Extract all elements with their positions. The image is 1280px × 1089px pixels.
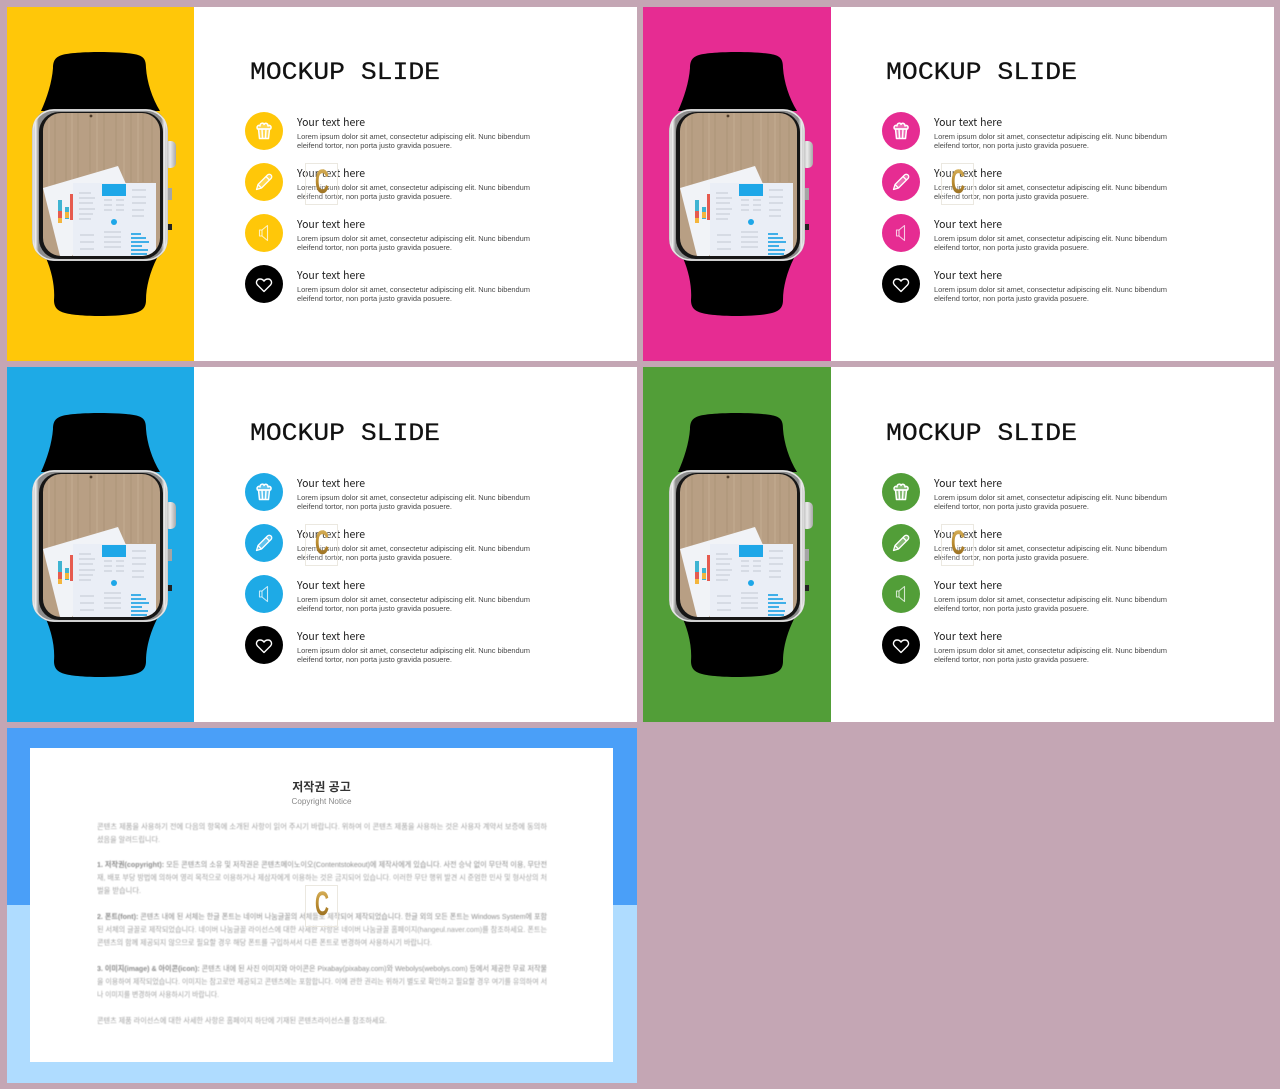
- item 2: pencil icon and text: Your text here: [933, 526, 1002, 542]
- item 1: gift icon and text: Your text here: [933, 475, 1002, 491]
- watermark: gold C: [306, 524, 338, 566]
- item 4: heart icon and text: Your text here: [296, 267, 365, 283]
- item 1: gift icon and text: [245, 112, 530, 150]
- item 4: heart icon and text: [245, 626, 530, 664]
- item 1: gift icon and text: eleifend tortor, non porta justo gravida posuere.: [934, 141, 1089, 150]
- item 4: heart icon and text: eleifend tortor, non porta justo gravida posuere.: [297, 655, 452, 664]
- item 2: pencil icon and text: [882, 524, 1167, 562]
- item 1: gift icon and text: [882, 473, 1167, 511]
- notice intro text: [97, 821, 547, 844]
- item 4: heart icon and text: Lorem ipsum dolor sit amet, consectetur adipiscing elit. Nunc bibendum: [297, 646, 530, 655]
- item 2: pencil icon and text: Your text here: [296, 526, 365, 542]
- item 2: pencil icon and text: [245, 524, 530, 562]
- item 2: pencil icon and text: [245, 163, 530, 201]
- item 2: pencil icon and text: Your text here: [933, 165, 1002, 181]
- notice section 2: font: [97, 911, 547, 947]
- item 1: gift icon and text: eleifend tortor, non porta justo gravida posuere.: [297, 502, 452, 511]
- watermark: gold C: C: [951, 524, 965, 562]
- item 4: heart icon and text: eleifend tortor, non porta justo gravida posuere.: [934, 294, 1089, 303]
- notice section 3: image and icon: 3. 이미지(image) & 아이콘(icon): 콘텐츠 내에 된 사진 이미지와 아이콘은 Pixabay(pixabay.com)와 Webolys(webolys.com) 등에서 제공한 무료 저작물: [97, 963, 547, 973]
- watermark: gold C: [942, 163, 974, 204]
- item 4: heart icon and text: Your text here: [933, 628, 1002, 644]
- item 1: gift icon and text: Lorem ipsum dolor sit amet, consectetur adipiscing elit. Nunc bibendum: [934, 132, 1167, 141]
- item 3: speaker icon and text: eleifend tortor, non porta justo gravida posuere.: [934, 243, 1089, 252]
- watermark: gold C: C: [951, 163, 965, 201]
- panel: copyright notice: [7, 728, 637, 1083]
- watermark: gold C: [306, 885, 338, 926]
- item 3: speaker icon and text: eleifend tortor, non porta justo gravida posuere.: [934, 604, 1089, 613]
- notice title: 저작권 공고: [292, 779, 351, 794]
- notice subtitle: Copyright Notice: [292, 796, 352, 806]
- notice section 3: image and icon: [97, 963, 547, 999]
- item 1: gift icon and text: Lorem ipsum dolor sit amet, consectetur adipiscing elit. Nunc bibendum: [297, 132, 530, 141]
- item 1: gift icon and text: [245, 473, 530, 511]
- notice section 2: font: 된 서체의 글꼴로 제작되었습니다. 네이버 나눔글꼴 라이선스에 대한 사세한 사항은 네이버 나눔글꼴 홈페이지(hangeul.naver.com)를 참조하세요. 폰트는: [97, 924, 547, 934]
- item 3: speaker icon and text: [245, 214, 530, 252]
- panel: green mockup slide: [643, 367, 1274, 722]
- watermark: gold C: [942, 524, 974, 566]
- panel: blue mockup slide: [7, 367, 637, 722]
- item 1: gift icon and text: [882, 112, 1167, 150]
- item 2: pencil icon and text: eleifend tortor, non porta justo gravida posuere.: [934, 553, 1089, 562]
- watermark: gold C: C: [315, 885, 329, 923]
- item 2: pencil icon and text: eleifend tortor, non porta justo gravida posuere.: [934, 192, 1089, 201]
- item 3: speaker icon and text: Lorem ipsum dolor sit amet, consectetur adipiscing elit. Nunc bibendum: [934, 234, 1167, 243]
- item 2: pencil icon and text: eleifend tortor, non porta justo gravida posuere.: [297, 553, 452, 562]
- item 1: gift icon and text: Your text here: [933, 114, 1002, 130]
- item 2: pencil icon and text: eleifend tortor, non porta justo gravida posuere.: [297, 192, 452, 201]
- notice footer line: 콘텐츠 제품 라이선스에 대한 사세한 사항은 홈페이지 하단에 기재된 콘텐츠라이선스를 참조하세요.: [97, 1015, 387, 1025]
- item 2: pencil icon and text: Lorem ipsum dolor sit amet, consectetur adipiscing elit. Nunc bibendum: [934, 544, 1167, 553]
- item 3: speaker icon and text: Lorem ipsum dolor sit amet, consectetur adipiscing elit. Nunc bibendum: [934, 595, 1167, 604]
- item 4: heart icon and text: Your text here: [933, 267, 1002, 283]
- item 3: speaker icon and text: Your text here: [933, 577, 1002, 593]
- item 4: heart icon and text: eleifend tortor, non porta justo gravida posuere.: [934, 655, 1089, 664]
- item 1: gift icon and text: eleifend tortor, non porta justo gravida posuere.: [934, 502, 1089, 511]
- item 4: heart icon and text: [882, 626, 1167, 664]
- notice section 2: font: 콘텐츠의 함께 제공되지 않으므로 필요할 경우 해당 폰트를 구입하셔서 다른 폰트로 변경하여 사용하시기 바랍니다.: [97, 937, 432, 947]
- notice section 3: image and icon: 을 이용하여 제작되었습니다. 이미지는 참고로만 제공되고 콘텐츠에는 포함합니다. 이에 관한 권리는 위하기 별도로 확인하고 필요할 경우 여기를 유의하여 서: [97, 976, 547, 986]
- notice section 1: copyright: 재, 배포 부당 방법에 의하여 영리 목적으로 이용하거나 제삼자에게 이용하는 것은 금지되어 있습니다. 이러한 무단 행위 발견 시 준엄한 민사 및 형사상의 처: [97, 872, 547, 882]
- item 4: heart icon and text: Lorem ipsum dolor sit amet, consectetur adipiscing elit. Nunc bibendum: [934, 646, 1167, 655]
- item 3: speaker icon and text: Your text here: [296, 216, 365, 232]
- item 4: heart icon and text: Lorem ipsum dolor sit amet, consectetur adipiscing elit. Nunc bibendum: [934, 285, 1167, 294]
- item 1: gift icon and text: Lorem ipsum dolor sit amet, consectetur adipiscing elit. Nunc bibendum: [297, 493, 530, 502]
- item 2: pencil icon and text: Your text here: [296, 165, 365, 181]
- item 3: speaker icon and text: [882, 575, 1167, 613]
- item 2: pencil icon and text: Lorem ipsum dolor sit amet, consectetur adipiscing elit. Nunc bibendum: [297, 183, 530, 192]
- panel: magenta mockup slide: [643, 7, 1274, 361]
- watermark: gold C: [306, 163, 338, 204]
- item 2: pencil icon and text: [882, 163, 1167, 201]
- panel: yellow mockup slide: [7, 7, 637, 361]
- item 4: heart icon and text: eleifend tortor, non porta justo gravida posuere.: [297, 294, 452, 303]
- item 3: speaker icon and text: eleifend tortor, non porta justo gravida posuere.: [297, 243, 452, 252]
- notice section 3: image and icon: 나 이미지를 변경하여 사용하시기 바랍니다.: [97, 989, 219, 999]
- item 1: gift icon and text: eleifend tortor, non porta justo gravida posuere.: [297, 141, 452, 150]
- item 3: speaker icon and text: Lorem ipsum dolor sit amet, consectetur adipiscing elit. Nunc bibendum: [297, 234, 530, 243]
- heading: blue slide: MOCKUP SLIDE: [250, 419, 440, 448]
- notice section 2: font: 2. 폰트(font): 콘텐츠 내에 된 서체는 한글 폰트는 네이버 나눔글꼴의 서체들로 제작되어 제작되었습니다. 한글 외의 모든 폰트는 Windows System에 포함: [97, 911, 547, 921]
- item 3: speaker icon and text: [882, 214, 1167, 252]
- heading: yellow slide: MOCKUP SLIDE: [250, 58, 440, 87]
- item 3: speaker icon and text: Your text here: [933, 216, 1002, 232]
- item 3: speaker icon and text: [245, 575, 530, 613]
- item 2: pencil icon and text: Lorem ipsum dolor sit amet, consectetur adipiscing elit. Nunc bibendum: [297, 544, 530, 553]
- notice intro text: 셨음을 알려드립니다.: [97, 834, 160, 844]
- item 4: heart icon and text: Your text here: [296, 628, 365, 644]
- item 4: heart icon and text: [882, 265, 1167, 303]
- watermark: gold C: C: [315, 524, 329, 562]
- item 3: speaker icon and text: eleifend tortor, non porta justo gravida posuere.: [297, 604, 452, 613]
- notice section 1: copyright: [97, 859, 547, 895]
- notice intro text: 콘텐츠 제품을 사용하기 전에 다음의 항목에 소개된 사항이 읽어 주시기 바랍니다. 위하여 이 콘텐츠 제품을 사용하는 것은 사용자 계약서 보증에 동의하: [97, 821, 547, 831]
- heading: green slide: MOCKUP SLIDE: [886, 419, 1077, 448]
- item 4: heart icon and text: Lorem ipsum dolor sit amet, consectetur adipiscing elit. Nunc bibendum: [297, 285, 530, 294]
- notice section 1: copyright: 벌을 받습니다.: [97, 885, 141, 895]
- item 1: gift icon and text: Your text here: [296, 114, 365, 130]
- item 2: pencil icon and text: Lorem ipsum dolor sit amet, consectetur adipiscing elit. Nunc bibendum: [934, 183, 1167, 192]
- watermark: gold C: C: [315, 163, 329, 201]
- item 1: gift icon and text: Lorem ipsum dolor sit amet, consectetur adipiscing elit. Nunc bibendum: [934, 493, 1167, 502]
- item 1: gift icon and text: Your text here: [296, 475, 365, 491]
- notice section 1: copyright: 1. 저작권(copyright): 모든 콘텐츠의 소유 및 저작권은 콘텐츠메이노이오(Contentstokeout)에 제작사에게 있습니다. 사전 승낙 없이 무단적 이용, 무단전: [97, 859, 547, 869]
- heading: magenta slide: MOCKUP SLIDE: [886, 58, 1077, 87]
- item 4: heart icon and text: [245, 265, 530, 303]
- item 3: speaker icon and text: Lorem ipsum dolor sit amet, consectetur adipiscing elit. Nunc bibendum: [297, 595, 530, 604]
- item 3: speaker icon and text: Your text here: [296, 577, 365, 593]
